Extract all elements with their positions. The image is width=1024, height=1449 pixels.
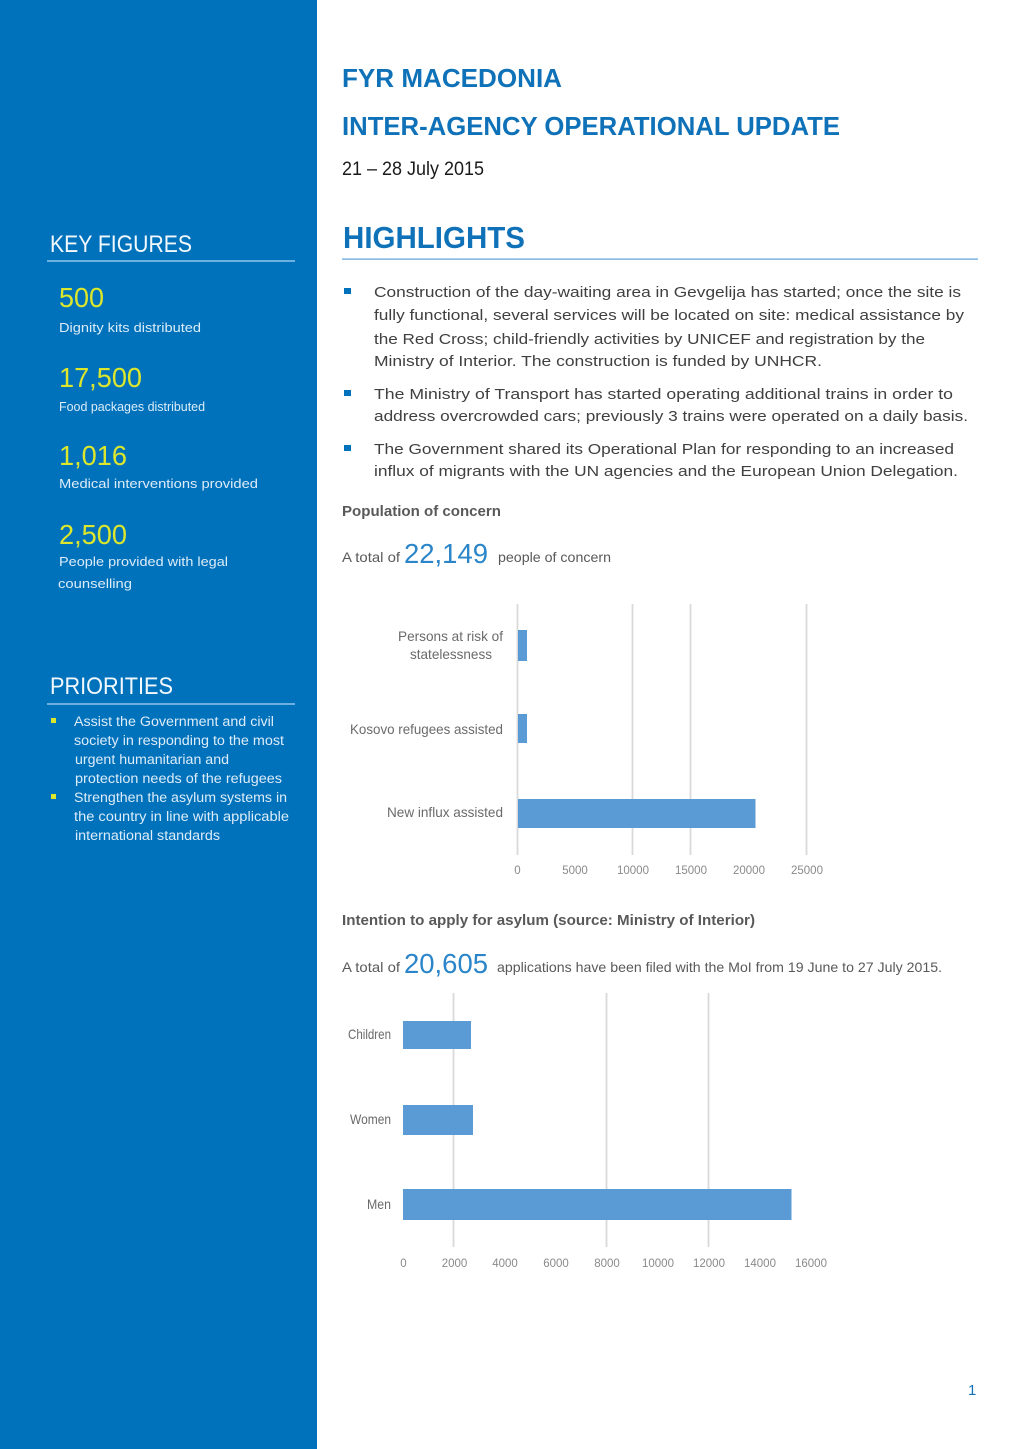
page number: 1 [968,1382,976,1399]
priorities list: society in responding to the most [74,733,284,748]
key figure: legal counselling [58,519,228,591]
panel: blue sidebar [0,0,317,1449]
axis labels: 14000 [744,1258,776,1270]
title: INTER-AGENCY OPERATIONAL UPDATE [342,111,840,141]
population total: people of concern [498,549,611,565]
key figure: legal counselling: counselling [58,576,132,591]
highlights list [344,285,968,480]
axis labels: 4000 [492,1258,518,1270]
highlights list: The Government shared its Operational Plan for responding to an increased [374,442,954,458]
population total [342,538,611,569]
axis labels: 2000 [442,1258,467,1270]
bar: new influx assisted [387,799,756,828]
axis labels: 20000 [733,865,765,877]
heading: key figures: KEY FIGURES [50,231,192,258]
axis labels: 0 [514,865,521,877]
priorities list: Strengthen the asylum systems in [74,790,287,805]
heading: priorities: PRIORITIES [50,673,173,700]
key figure: dignity kits [59,282,201,335]
title: FYR MACEDONIA [342,63,562,93]
bar: women [350,1105,473,1135]
axis labels: 16000 [795,1258,827,1270]
bar: men: Men [367,1196,391,1212]
highlights list: influx of migrants with the UN agencies and the European Union Delegation. [374,464,958,480]
heading: highlights: HIGHLIGHTS [343,220,525,255]
axis labels [400,1258,827,1270]
axis labels: 12000 [693,1258,725,1270]
asylum total: applications have been filed with the MoI from 19 June to 27 July 2015. [497,959,942,975]
priorities list: protection needs of the refugees [75,771,282,786]
bar: men [367,1189,792,1220]
highlights list: The Ministry of Transport has started operating additional trains in order to [374,387,953,403]
asylum total: 20,605 [404,948,488,979]
population total: 22,149 [404,538,488,569]
highlights list: Construction of the day-waiting area in Gevgelija has started; once the site is [374,285,961,301]
asylum total [342,948,942,979]
key figure: food packages [59,362,205,414]
highlights list: address overcrowded cars; previously 3 trains were operated on a daily basis. [374,409,968,425]
bar: new influx assisted: New influx assisted [387,804,503,820]
priorities list: urgent humanitarian and [75,752,229,767]
key figure: legal counselling: People provided with legal [59,554,228,569]
heading: population of concern: Population of concern [342,504,501,520]
bar chart: asylum applications [348,993,827,1270]
title [342,63,840,141]
key figure: food packages: 17,500 [59,362,142,393]
key figure: medical interventions [59,440,258,491]
bar: kosovo refugees assisted [350,714,527,743]
date: 21 – 28 July 2015 [342,159,484,180]
key figure: dignity kits: Dignity kits distributed [59,320,201,335]
key figure: food packages: Food packages distributed [59,399,205,414]
key figure: legal counselling: 2,500 [59,519,127,550]
bar: persons at risk of statelessness: Persons at risk of [398,628,503,644]
axis labels: 0 [400,1258,407,1270]
bar chart: population of concern [350,604,823,877]
axis labels: 5000 [562,865,588,877]
axis labels: 8000 [594,1258,620,1270]
key figure: dignity kits: 500 [59,282,104,313]
axis labels: 6000 [543,1258,569,1270]
priorities list: the country in line with applicable [74,809,289,824]
asylum total: A total of [342,959,400,975]
axis labels: 10000 [617,865,649,877]
key figure: medical interventions: Medical interventions provided [59,476,258,491]
bar: children [348,1021,471,1049]
priorities list [51,714,289,843]
key figure: medical interventions: 1,016 [59,440,127,471]
bar: persons at risk of statelessness: statelessness [410,646,492,662]
population total: A total of [342,549,400,565]
bar: kosovo refugees assisted: Kosovo refugees assisted [350,721,503,737]
axis labels: 10000 [642,1258,674,1270]
highlights list: the Red Cross; child-friendly activities by UNICEF and registration by the [374,332,925,348]
axis labels [514,865,823,877]
bar: children: Children [348,1026,391,1042]
bar: women: Women [350,1111,391,1127]
axis labels: 25000 [791,865,823,877]
heading: intention to apply for asylum: Intention to apply for asylum (source: Ministry of Interior) [342,913,755,929]
priorities list: international standards [75,828,220,843]
axis labels: 15000 [675,865,707,877]
priorities list: Assist the Government and civil [74,714,274,729]
bar: persons at risk of statelessness [398,628,527,662]
highlights list: fully functional, several services will be located on site: medical assistance by [374,308,965,324]
highlights list: Ministry of Interior. The construction is funded by UNHCR. [374,354,822,370]
